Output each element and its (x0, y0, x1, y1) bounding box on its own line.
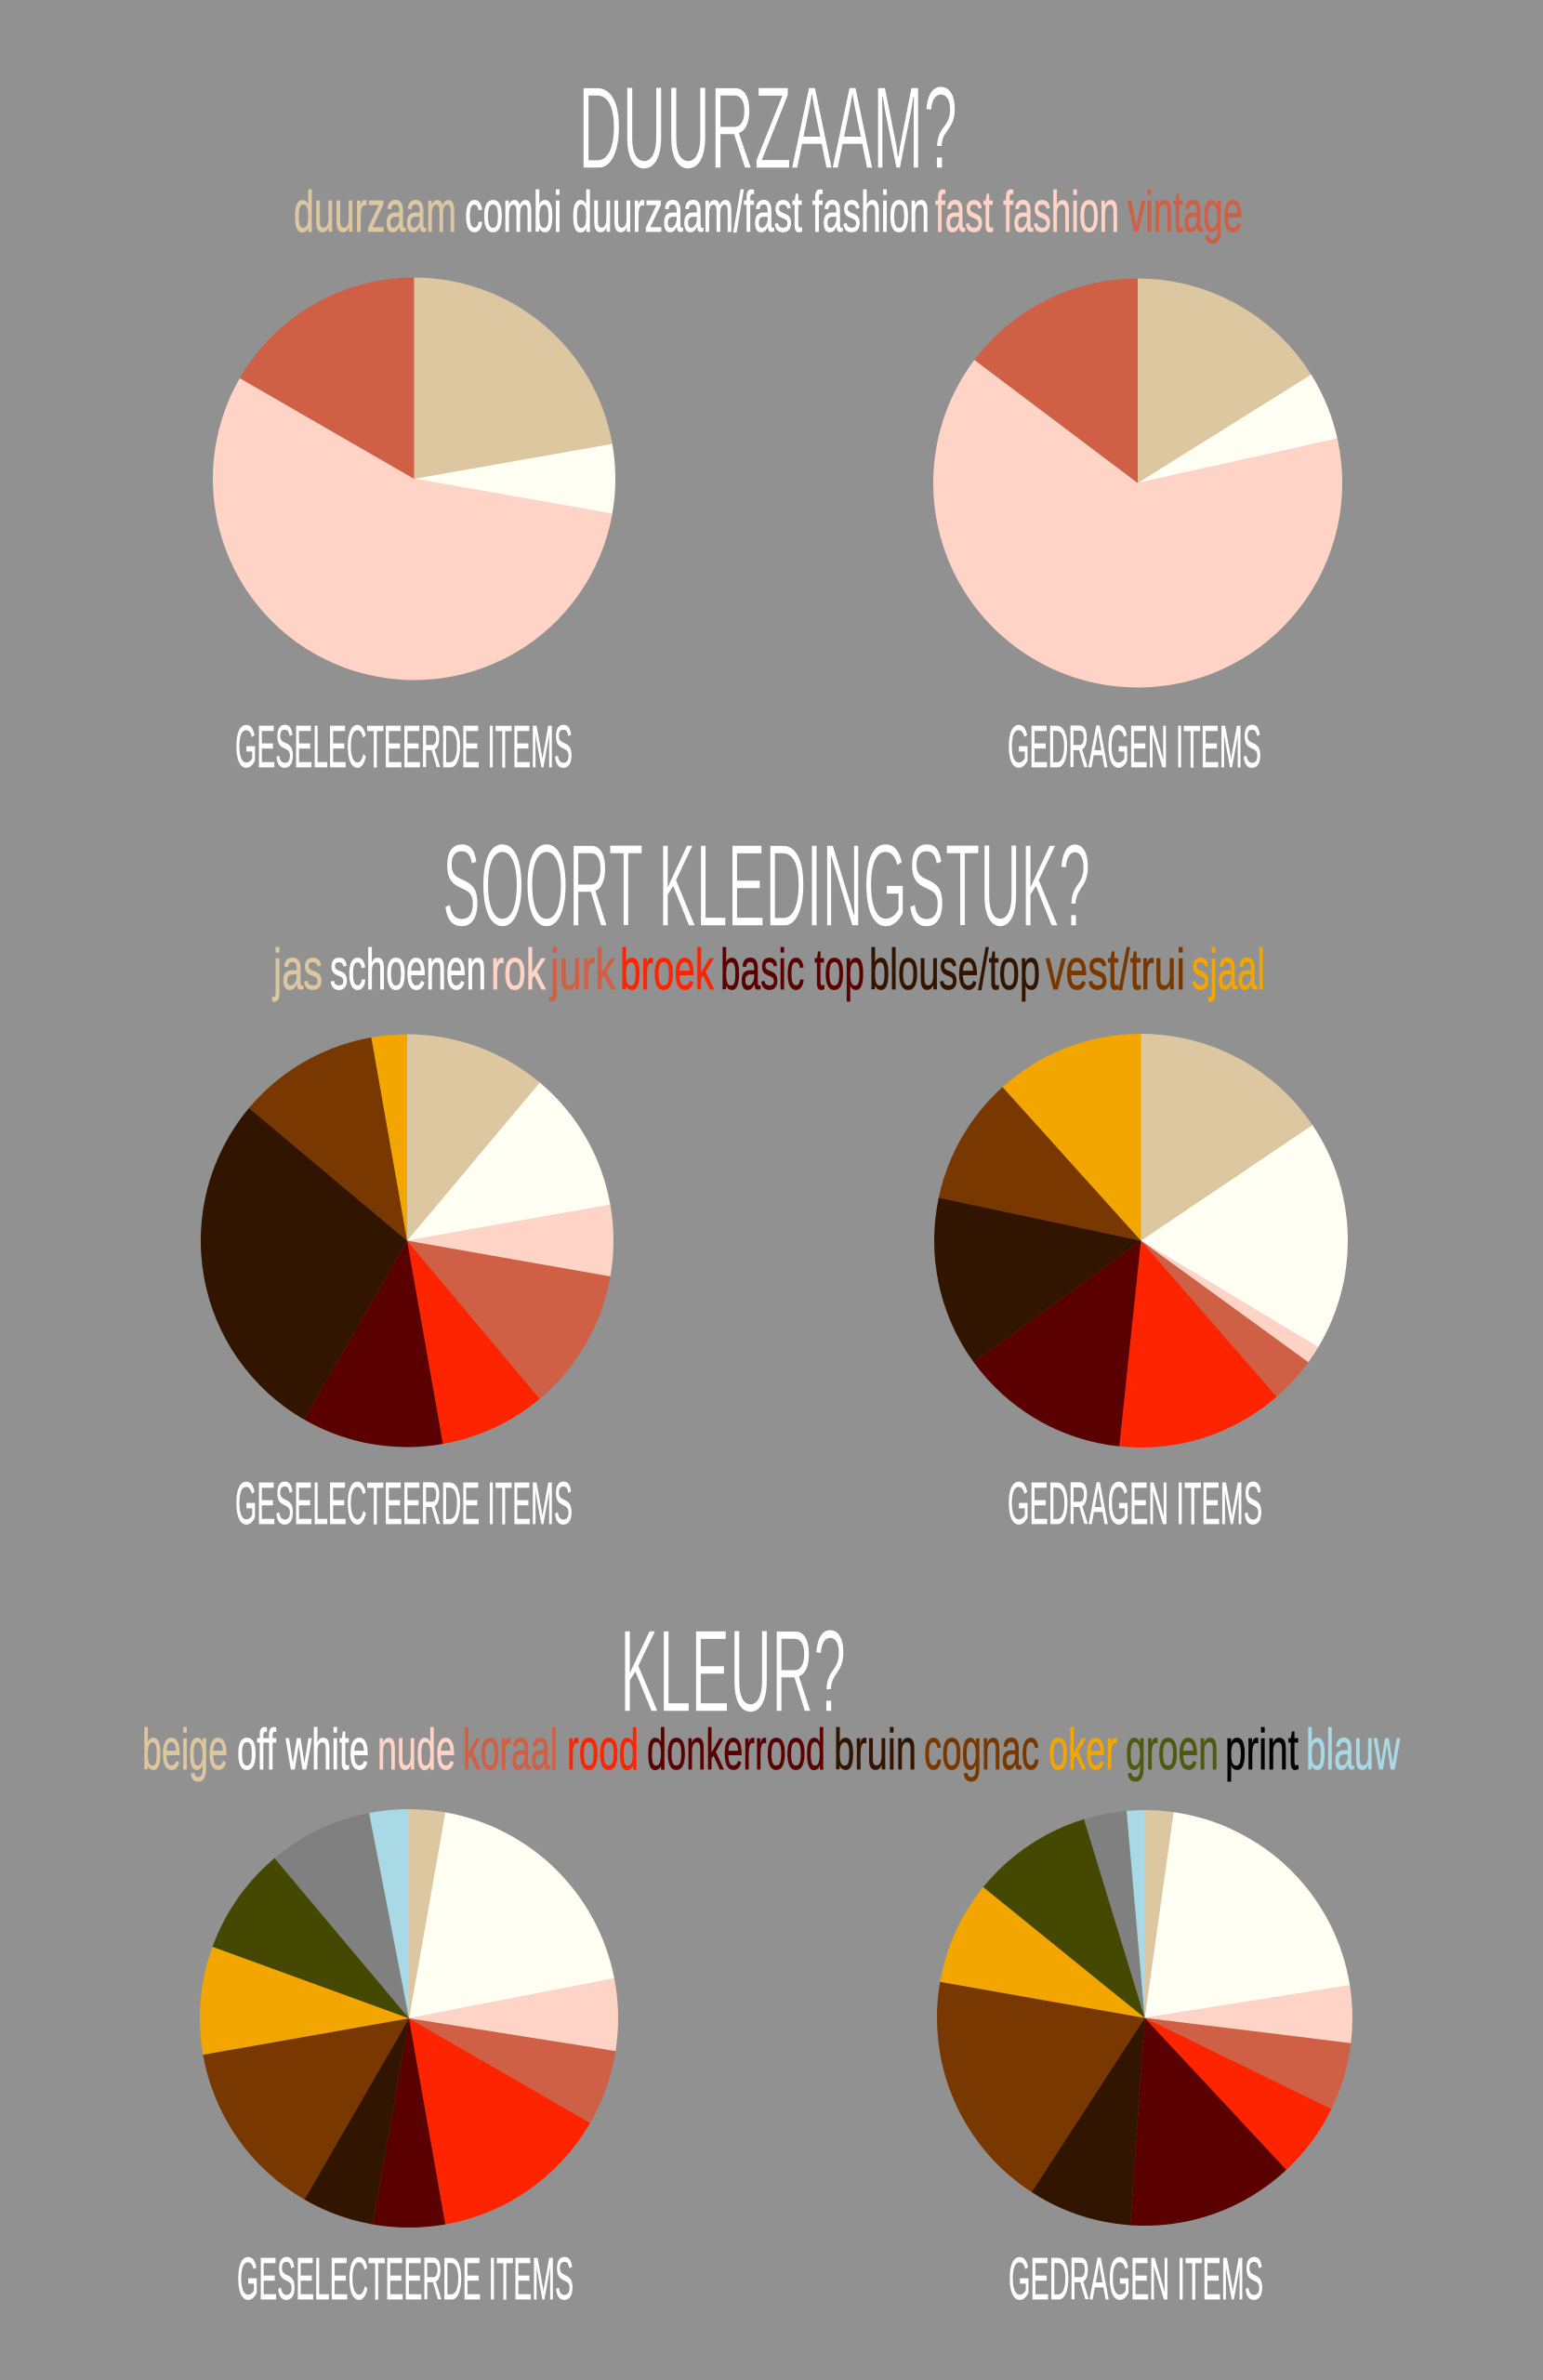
panel: kleur (142, 1606, 1400, 2312)
legend: soort kledingstuk: vest/trui (1046, 938, 1185, 1002)
legend: duurzaam: duurzaam (294, 180, 456, 245)
legend: kleur: blauw (1306, 1718, 1400, 1782)
legend: soort kledingstuk (272, 938, 1265, 1002)
pie chart: soort kledingstuk, gedragen items (934, 1034, 1348, 1448)
panel: duurzaam: GEDRAGEN ITEMS (1008, 713, 1261, 780)
pie chart: soort kledingstuk, geselecteerde items (201, 1034, 613, 1447)
pie chart: kleur, gedragen items (937, 1810, 1352, 2226)
panel: kleur: GEDRAGEN ITEMS (1009, 2245, 1263, 2312)
pie chart: kleur, geselecteerde items (200, 1809, 618, 2228)
legend: duurzaam: fast fashion (935, 180, 1119, 245)
legend: duurzaam: combi duurzaam/fast fashion (465, 180, 930, 245)
legend: kleur: cognac (924, 1718, 1039, 1782)
panel: soort kledingstuk: GESELECTEERDE ITEMS (235, 1470, 573, 1537)
legend: soort kledingstuk: blouse/top (869, 938, 1040, 1002)
pie chart: duurzaam, geselecteerde items (213, 277, 615, 681)
legend: soort kledingstuk: basic top (720, 938, 864, 1002)
legend: kleur: oker (1048, 1718, 1117, 1782)
legend: kleur: beige (142, 1718, 228, 1782)
legend: kleur: rood (567, 1718, 639, 1782)
legend: soort kledingstuk: sjaal (1192, 938, 1265, 1002)
panel: duurzaam (213, 62, 1342, 780)
panel: kleur: KLEUR? (620, 1606, 846, 1737)
legend: soort kledingstuk: rok (491, 938, 547, 1002)
panel: kleur: GESELECTEERDE ITEMS (237, 2245, 574, 2312)
panel: duurzaam: GESELECTEERDE ITEMS (235, 713, 573, 780)
legend: soort kledingstuk: schoenen (330, 938, 486, 1002)
legend: soort kledingstuk: broek (620, 938, 715, 1002)
legend: kleur: off white (237, 1718, 369, 1782)
pie chart: duurzaam, gedragen items (933, 279, 1342, 687)
legend: kleur (142, 1718, 1400, 1782)
legend: kleur: print (1225, 1718, 1299, 1782)
legend: soort kledingstuk: jurk (549, 938, 616, 1002)
title: duurzaam: DUURZAAM? (578, 62, 957, 193)
legend: duurzaam: vintage (1128, 180, 1243, 245)
legend: kleur: nude (377, 1718, 455, 1782)
panel: soort kledingstuk: GEDRAGEN ITEMS (1008, 1470, 1262, 1537)
legend: kleur: bruin (834, 1718, 917, 1782)
panel: soort kledingstuk (201, 820, 1348, 1537)
legend: kleur: koraal (463, 1718, 558, 1782)
legend: soort kledingstuk: jas (272, 938, 323, 1002)
legend: kleur: donkerrood (647, 1718, 825, 1782)
legend: kleur: groen (1126, 1718, 1219, 1782)
